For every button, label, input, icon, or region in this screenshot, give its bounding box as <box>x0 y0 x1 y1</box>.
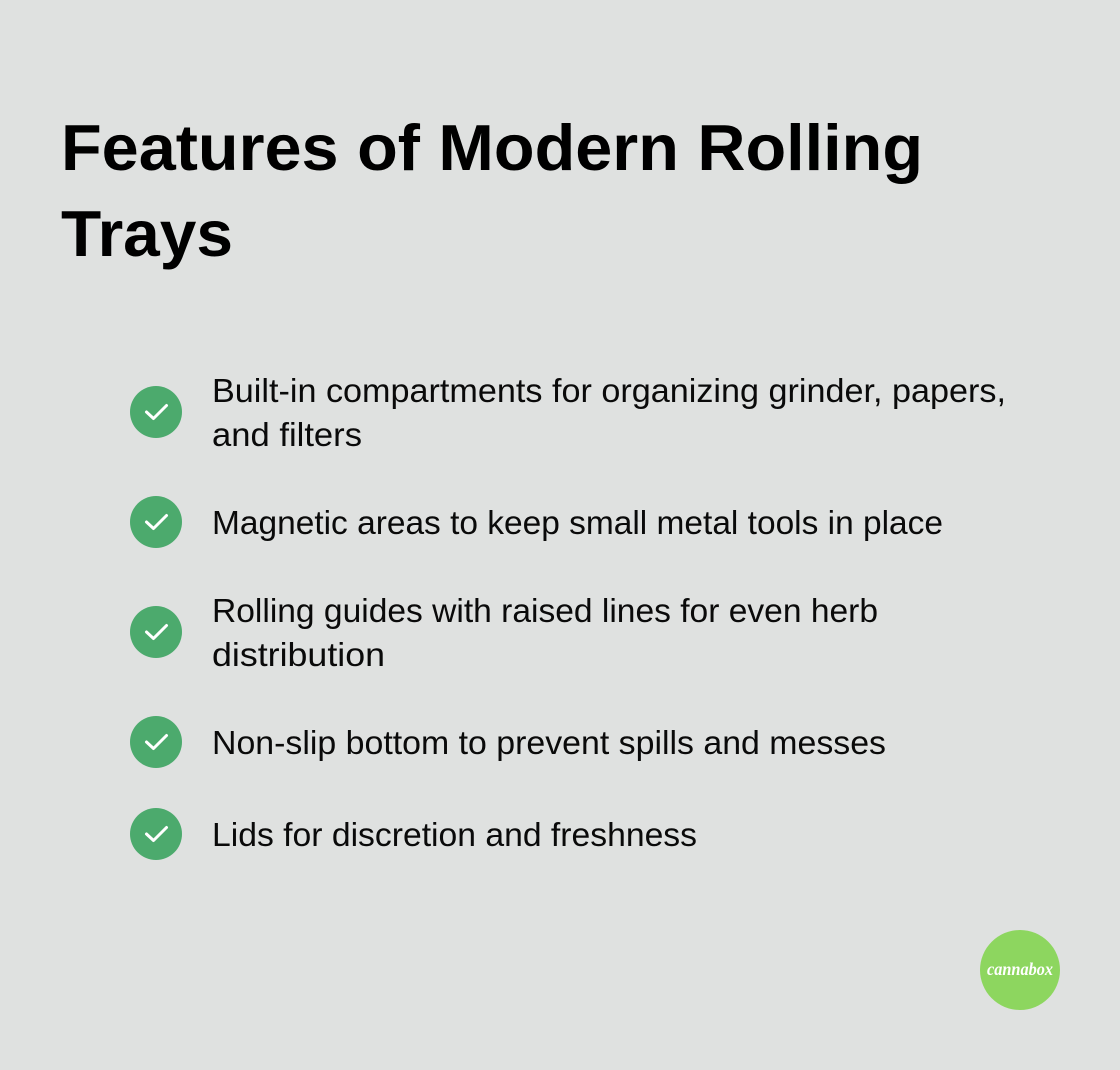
item 1 <box>130 372 1006 453</box>
item 4 text: Non-slip bottom to prevent spills and messes <box>212 724 886 761</box>
logo badge: cannabox <box>987 959 1053 979</box>
icon: check <box>130 808 182 860</box>
icon: check <box>130 606 182 658</box>
title: Features of Modern Rolling <box>61 111 923 184</box>
title <box>61 111 923 270</box>
icon: check <box>130 496 182 548</box>
item 2 text: Magnetic areas to keep small metal tools in place <box>212 504 943 541</box>
item 1 text: Built-in compartments for organizing grinder, papers, <box>212 372 1006 409</box>
item 1 text <box>212 372 1006 453</box>
item 3 text: Rolling guides with raised lines for even herb <box>212 592 878 629</box>
item 3 text <box>212 592 878 673</box>
item 2 <box>130 496 943 548</box>
item 5 <box>130 808 697 860</box>
title: Trays <box>61 197 233 270</box>
item 4 <box>130 716 886 768</box>
logo badge <box>980 930 1060 1010</box>
item 3 text: distribution <box>212 636 385 673</box>
item 5 text: Lids for discretion and freshness <box>212 816 697 853</box>
feature list <box>130 372 1006 860</box>
item 3 <box>130 592 878 673</box>
icon: check <box>130 716 182 768</box>
icon: check <box>130 386 182 438</box>
item 1 text: and filters <box>212 416 362 453</box>
